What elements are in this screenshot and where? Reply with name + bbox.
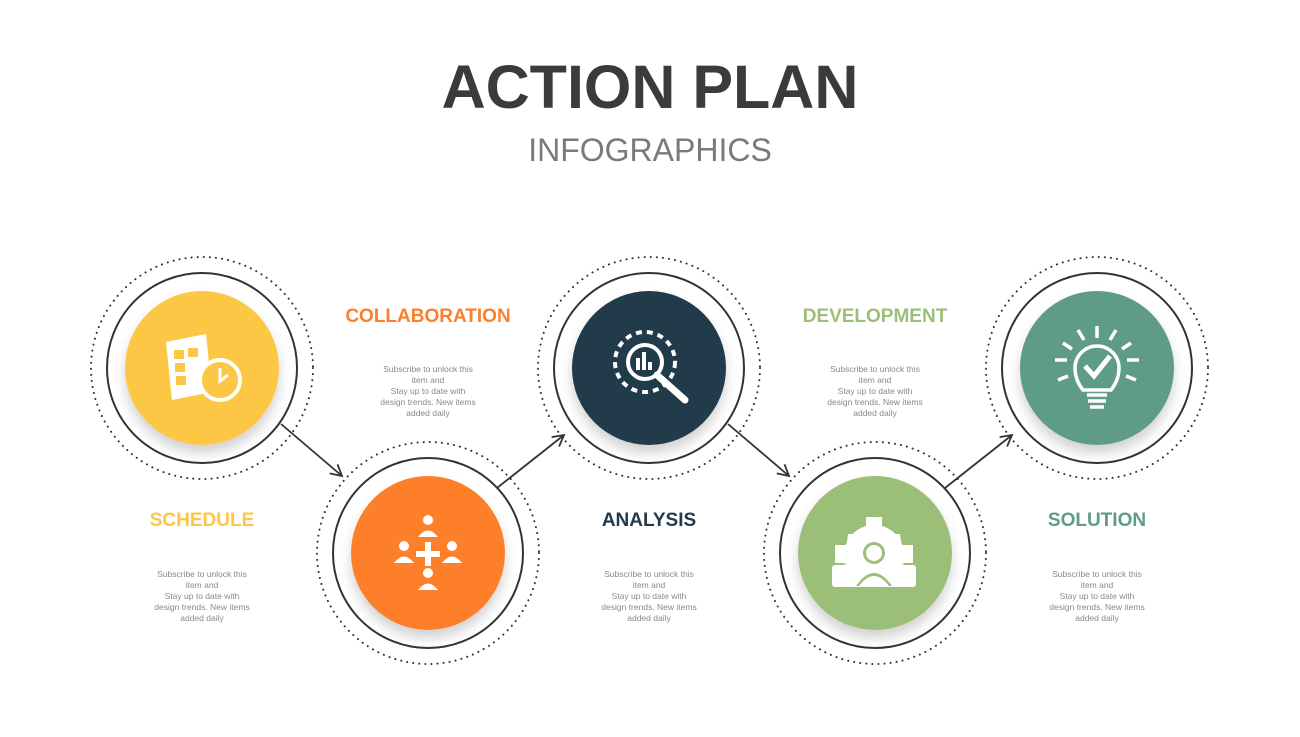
text: development: Subscribe to unlock this <box>830 364 920 374</box>
text: development: Stay up to date with <box>838 386 913 396</box>
subtitle: INFOGRAPHICS <box>528 132 772 168</box>
icon: lightbulb check <box>1055 326 1139 407</box>
text: development: added daily <box>853 408 897 418</box>
text: collaboration: Stay up to date with <box>391 386 466 396</box>
text: schedule: item and <box>186 580 219 590</box>
text: solution: Subscribe to unlock this <box>1052 569 1142 579</box>
icon: gear people <box>832 517 916 587</box>
step 2: collaboration <box>317 442 539 664</box>
icon: team <box>394 515 462 590</box>
text: solution: design trends. New items <box>1049 602 1145 612</box>
step 5: solution <box>986 257 1208 479</box>
text: analysis: added daily <box>627 613 671 623</box>
text: analysis: item and <box>633 580 666 590</box>
text: collaboration: Subscribe to unlock this <box>383 364 473 374</box>
text: schedule: Subscribe to unlock this <box>157 569 247 579</box>
text: analysis: Stay up to date with <box>612 591 687 601</box>
text: analysis: design trends. New items <box>601 602 697 612</box>
label: analysis: ANALYSIS <box>602 510 696 531</box>
text: collaboration: added daily <box>406 408 450 418</box>
arrow 2 <box>497 435 564 488</box>
icon: magnifier chart <box>615 332 685 400</box>
text: solution: item and <box>1081 580 1114 590</box>
text: collaboration: item and <box>412 375 445 385</box>
step 1: schedule <box>91 257 313 479</box>
label: schedule: SCHEDULE <box>150 510 254 531</box>
arrow 3 <box>728 424 789 476</box>
icon: calendar clock <box>166 334 240 400</box>
text: schedule: added daily <box>180 613 224 623</box>
text: analysis: Subscribe to unlock this <box>604 569 694 579</box>
arrow 1 <box>281 424 342 476</box>
title: ACTION PLAN <box>442 53 858 121</box>
text: collaboration: design trends. New items <box>380 397 476 407</box>
step 3: analysis <box>538 257 760 479</box>
text: schedule: design trends. New items <box>154 602 250 612</box>
text: schedule: Stay up to date with <box>165 591 240 601</box>
label: collaboration: COLLABORATION <box>345 306 511 327</box>
label: development: DEVELOPMENT <box>803 306 948 327</box>
text: solution: added daily <box>1075 613 1119 623</box>
text: development: design trends. New items <box>827 397 923 407</box>
text: solution: Stay up to date with <box>1060 591 1135 601</box>
text: development: item and <box>859 375 892 385</box>
arrow 4 <box>945 435 1012 488</box>
step 4: development <box>764 442 986 664</box>
label: solution: SOLUTION <box>1048 510 1146 531</box>
